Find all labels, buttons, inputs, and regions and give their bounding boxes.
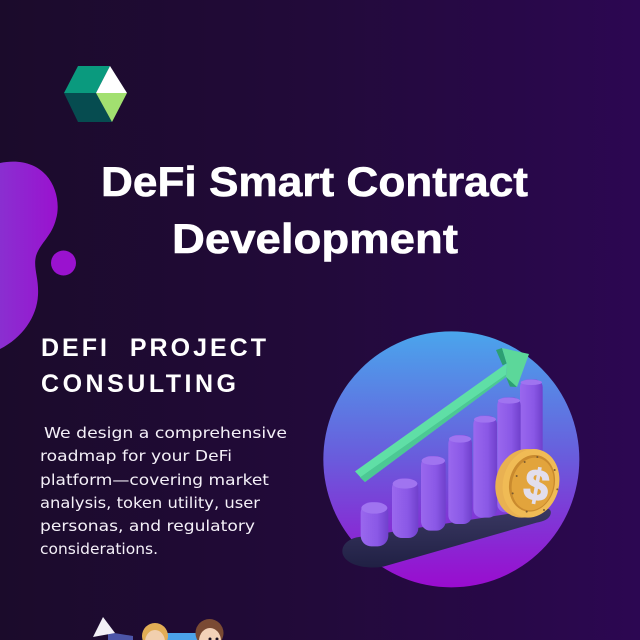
gradient circle — [323, 331, 579, 587]
section heading: CONSULTING — [41, 370, 236, 398]
blue chair — [166, 633, 198, 640]
decorative purple blob — [0, 162, 58, 349]
person with blond hair — [142, 623, 168, 640]
team illustration: cropped at bottom — [93, 617, 224, 640]
bars 1 to 5 — [361, 416, 497, 546]
section heading — [41, 334, 266, 398]
body text: platform—covering market — [40, 471, 269, 489]
illustration: growth chart in circle — [323, 331, 579, 587]
body text: We design a comprehensive — [44, 424, 287, 442]
body text — [40, 424, 287, 558]
green arrow — [355, 348, 529, 482]
section heading: DEFI PROJECT — [41, 334, 266, 362]
body text: considerations. — [40, 540, 158, 558]
bar 6 and 7 — [497, 379, 543, 512]
title: DeFi Smart Contract — [101, 158, 528, 205]
dollar coin: $ — [520, 459, 553, 512]
person with brown hair — [196, 619, 224, 640]
decorative purple dot — [51, 250, 76, 276]
body text: roadmap for your DeFi — [40, 447, 232, 465]
dollar coin — [488, 443, 567, 524]
title — [101, 158, 528, 262]
body text: personas, and regulatory — [40, 517, 255, 535]
megaphone — [93, 617, 133, 640]
title: Development — [172, 215, 458, 262]
body text: analysis, token utility, user — [40, 494, 261, 512]
logo: hexagonal cube — [64, 66, 127, 122]
chart base — [342, 508, 551, 567]
